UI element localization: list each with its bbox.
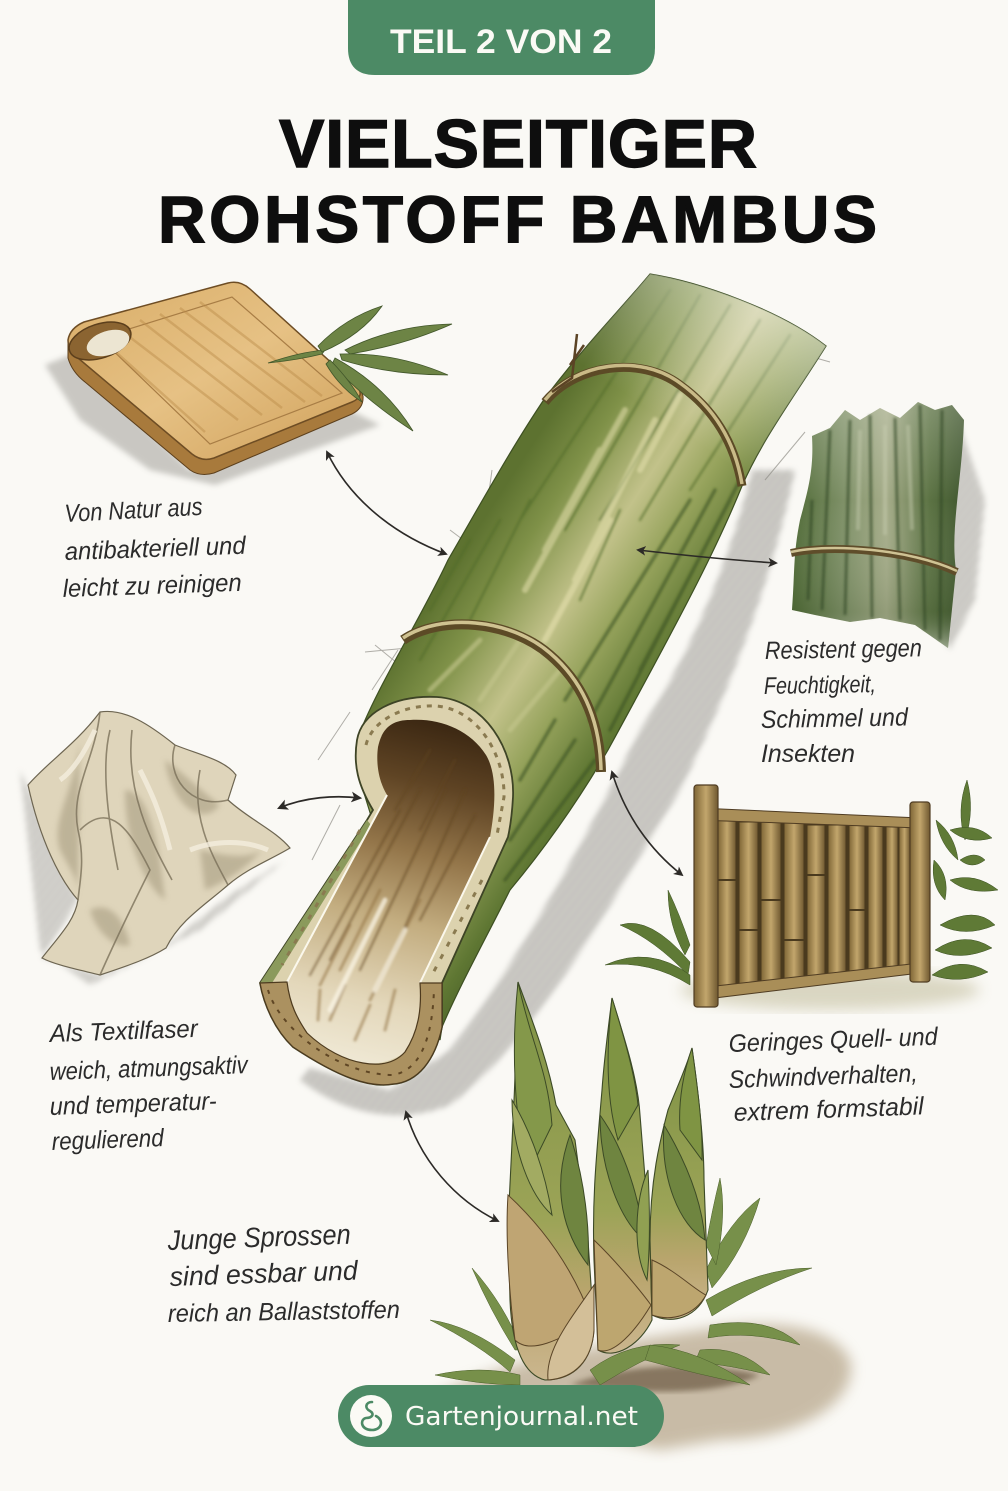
fence backing (715, 820, 912, 992)
stem fibre strokes (420, 290, 790, 880)
board handle hole (64, 315, 136, 367)
caption: edible shoots: Junge Sprossen (166, 1219, 351, 1256)
caption: textile fibre (47, 1015, 249, 1156)
illustration: cutting board (45, 282, 452, 485)
illustration: folded cloth (20, 711, 290, 985)
caption: antibacterial: antibakteriell und (64, 532, 247, 566)
caption: textile fibre: Als Textilfaser (47, 1015, 200, 1048)
footer badge: Gartenjournal.net: Gartenjournal.net (405, 1402, 638, 1432)
green outer edge of left wall (260, 820, 371, 983)
arrow: stem to shoots (406, 1112, 498, 1221)
shoot right (650, 1048, 708, 1319)
white inner edge lines (287, 795, 490, 983)
caption: edible shoots (166, 1219, 400, 1328)
caption: resistant (761, 634, 922, 768)
caption: edible shoots: sind essbar und (169, 1255, 359, 1292)
stem ground shadow (300, 470, 795, 1115)
caption: form stable: Schwindverhalten, (728, 1059, 918, 1094)
caption: textile fibre: regulierend (51, 1124, 165, 1156)
arrow: stem to fence (612, 772, 682, 875)
shoot centre (593, 998, 652, 1353)
caption: resistant: Feuchtigkeit, (764, 671, 876, 700)
channel wood grain (310, 750, 475, 1040)
caption: resistant: Resistent gegen (765, 634, 922, 665)
cut ring of the stem opening (260, 697, 513, 1085)
upper stem node (545, 334, 742, 486)
fence rails (698, 808, 920, 828)
caption: antibacterial (62, 493, 247, 603)
wall speckles (282, 830, 482, 975)
illustration: main bamboo stem (260, 274, 830, 1115)
header badge: Teil 2 von 2 (348, 0, 655, 75)
arrow: board to stem (327, 452, 446, 554)
grass (430, 1178, 812, 1385)
stem body (357, 274, 826, 1040)
header badge: Teil 2 von 2: TEIL 2 VON 2 (390, 23, 612, 61)
title (158, 106, 877, 256)
logo icon (350, 1395, 392, 1437)
fence background plants (605, 780, 998, 985)
illustration: bamboo wall piece (791, 402, 985, 650)
arrow: stem to wall piece (638, 550, 776, 563)
caption: textile fibre: und temperatur- (49, 1087, 217, 1121)
wall piece node (791, 549, 957, 572)
speckled ring fibres (366, 706, 504, 835)
illustration: bamboo fence (605, 780, 998, 1010)
caption: resistant: Schimmel und (761, 703, 909, 734)
title: ROHSTOFF BAMBUS (158, 182, 877, 256)
caption: textile fibre: weich, atmungsaktiv (49, 1051, 249, 1086)
caption: edible shoots: reich an Ballaststoffen (168, 1296, 400, 1328)
lower stem node (403, 622, 601, 772)
caption: form stable (728, 1023, 939, 1127)
title: VIELSEITIGER (279, 106, 757, 182)
caption: resistant: Insekten (761, 740, 855, 768)
caption: antibacterial: Von Natur aus (64, 493, 203, 528)
cut bottom rim (260, 982, 442, 1085)
interior of the channel (287, 720, 494, 1064)
caption: form stable: Geringes Quell- und (728, 1023, 939, 1058)
shoot left (507, 982, 594, 1380)
footer badge: Gartenjournal.net (338, 1385, 664, 1447)
stem top fade (545, 274, 826, 486)
caption: form stable: extrem formstabil (733, 1092, 926, 1127)
caption: antibacterial: leicht zu reinigen (62, 569, 242, 603)
illustration: bamboo shoots (420, 982, 851, 1450)
stray fibres around stem (312, 345, 830, 860)
fence posts (694, 785, 718, 1007)
fence slats (718, 820, 910, 988)
soil (420, 1324, 851, 1450)
bamboo leaves on board (268, 306, 452, 431)
arrow: cloth to stem (279, 797, 360, 808)
